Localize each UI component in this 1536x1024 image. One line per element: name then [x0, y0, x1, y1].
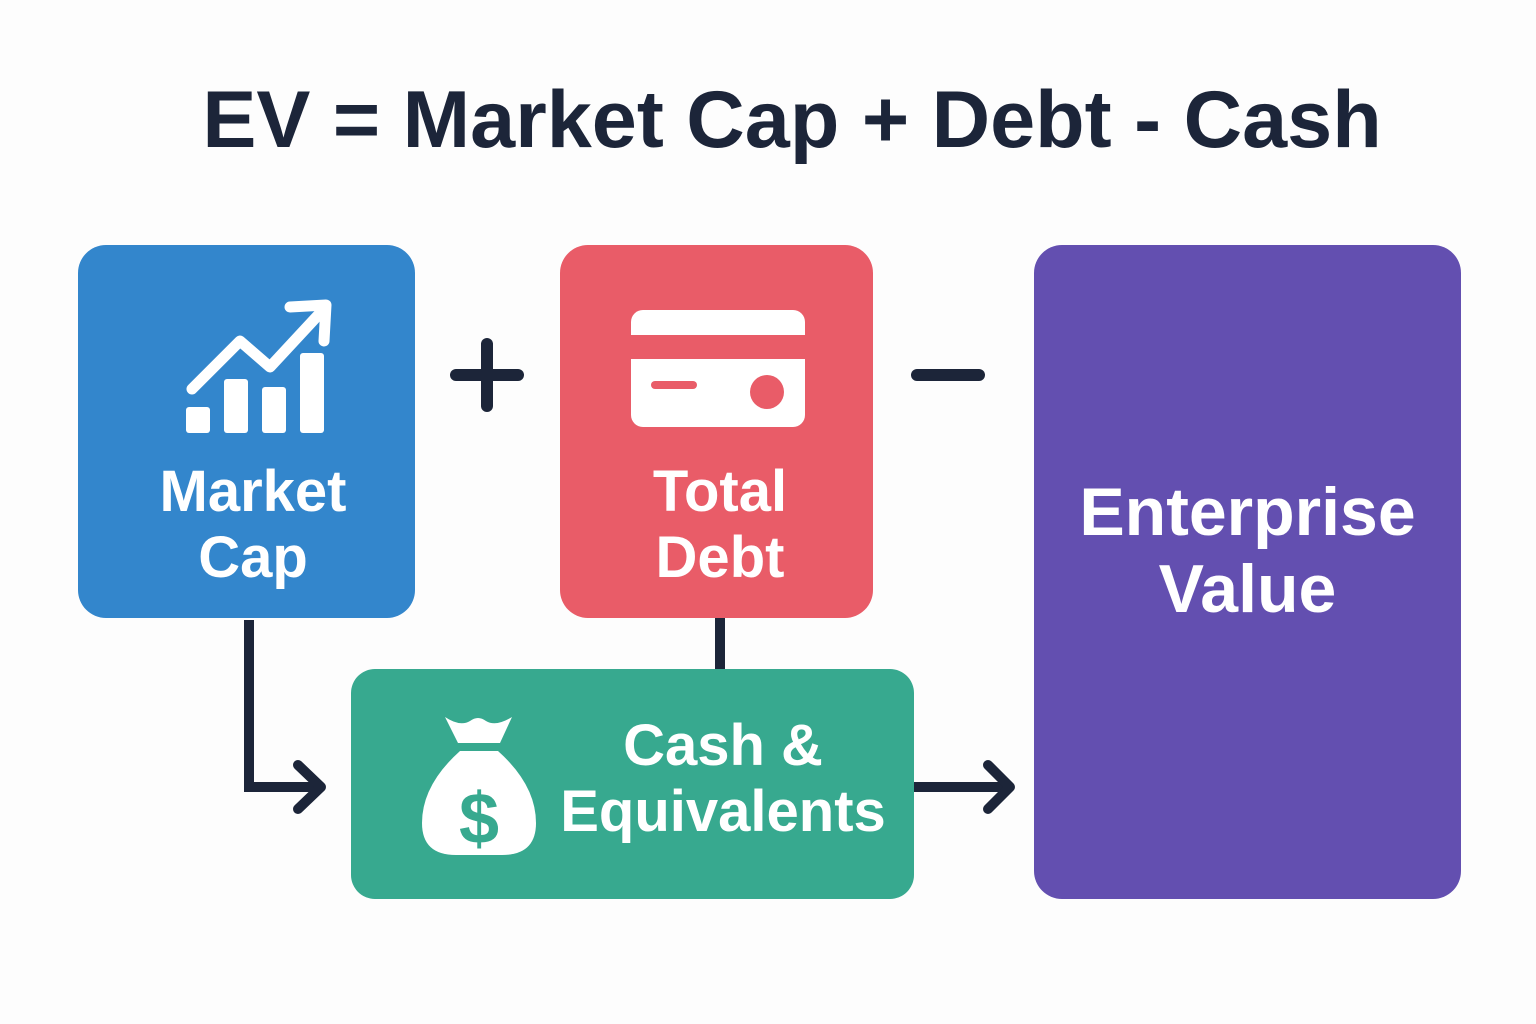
plus sign	[450, 338, 524, 412]
panel: market cap	[78, 245, 415, 618]
label: market cap: Market	[160, 459, 346, 524]
label: enterprise value	[1079, 474, 1416, 627]
icon: money bag: $	[459, 779, 499, 859]
icon: credit card	[631, 310, 805, 427]
arrow: cash to enterprise value	[914, 760, 1015, 814]
panel: enterprise value	[1034, 245, 1461, 899]
label: cash & equivalents	[560, 713, 886, 844]
title: EV = Market Cap + Debt - Cash	[202, 75, 1382, 165]
panel: total debt	[560, 245, 873, 618]
icon: money bag	[422, 717, 536, 859]
connector: debt to cash	[715, 618, 725, 670]
label: total debt: Total	[653, 459, 787, 524]
icon: growth chart	[186, 300, 332, 433]
minus sign	[911, 369, 985, 381]
label: total debt	[653, 459, 787, 590]
label: enterprise value: Value	[1159, 551, 1336, 627]
label: total debt: Debt	[656, 525, 784, 590]
label: cash & equivalents: Equivalents	[560, 779, 886, 844]
label: cash & equivalents: Cash &	[623, 713, 823, 778]
label: enterprise value: Enterprise	[1079, 474, 1416, 550]
panel: cash & equivalents	[351, 669, 914, 899]
label: market cap: Cap	[198, 525, 308, 590]
label: market cap	[160, 459, 346, 590]
